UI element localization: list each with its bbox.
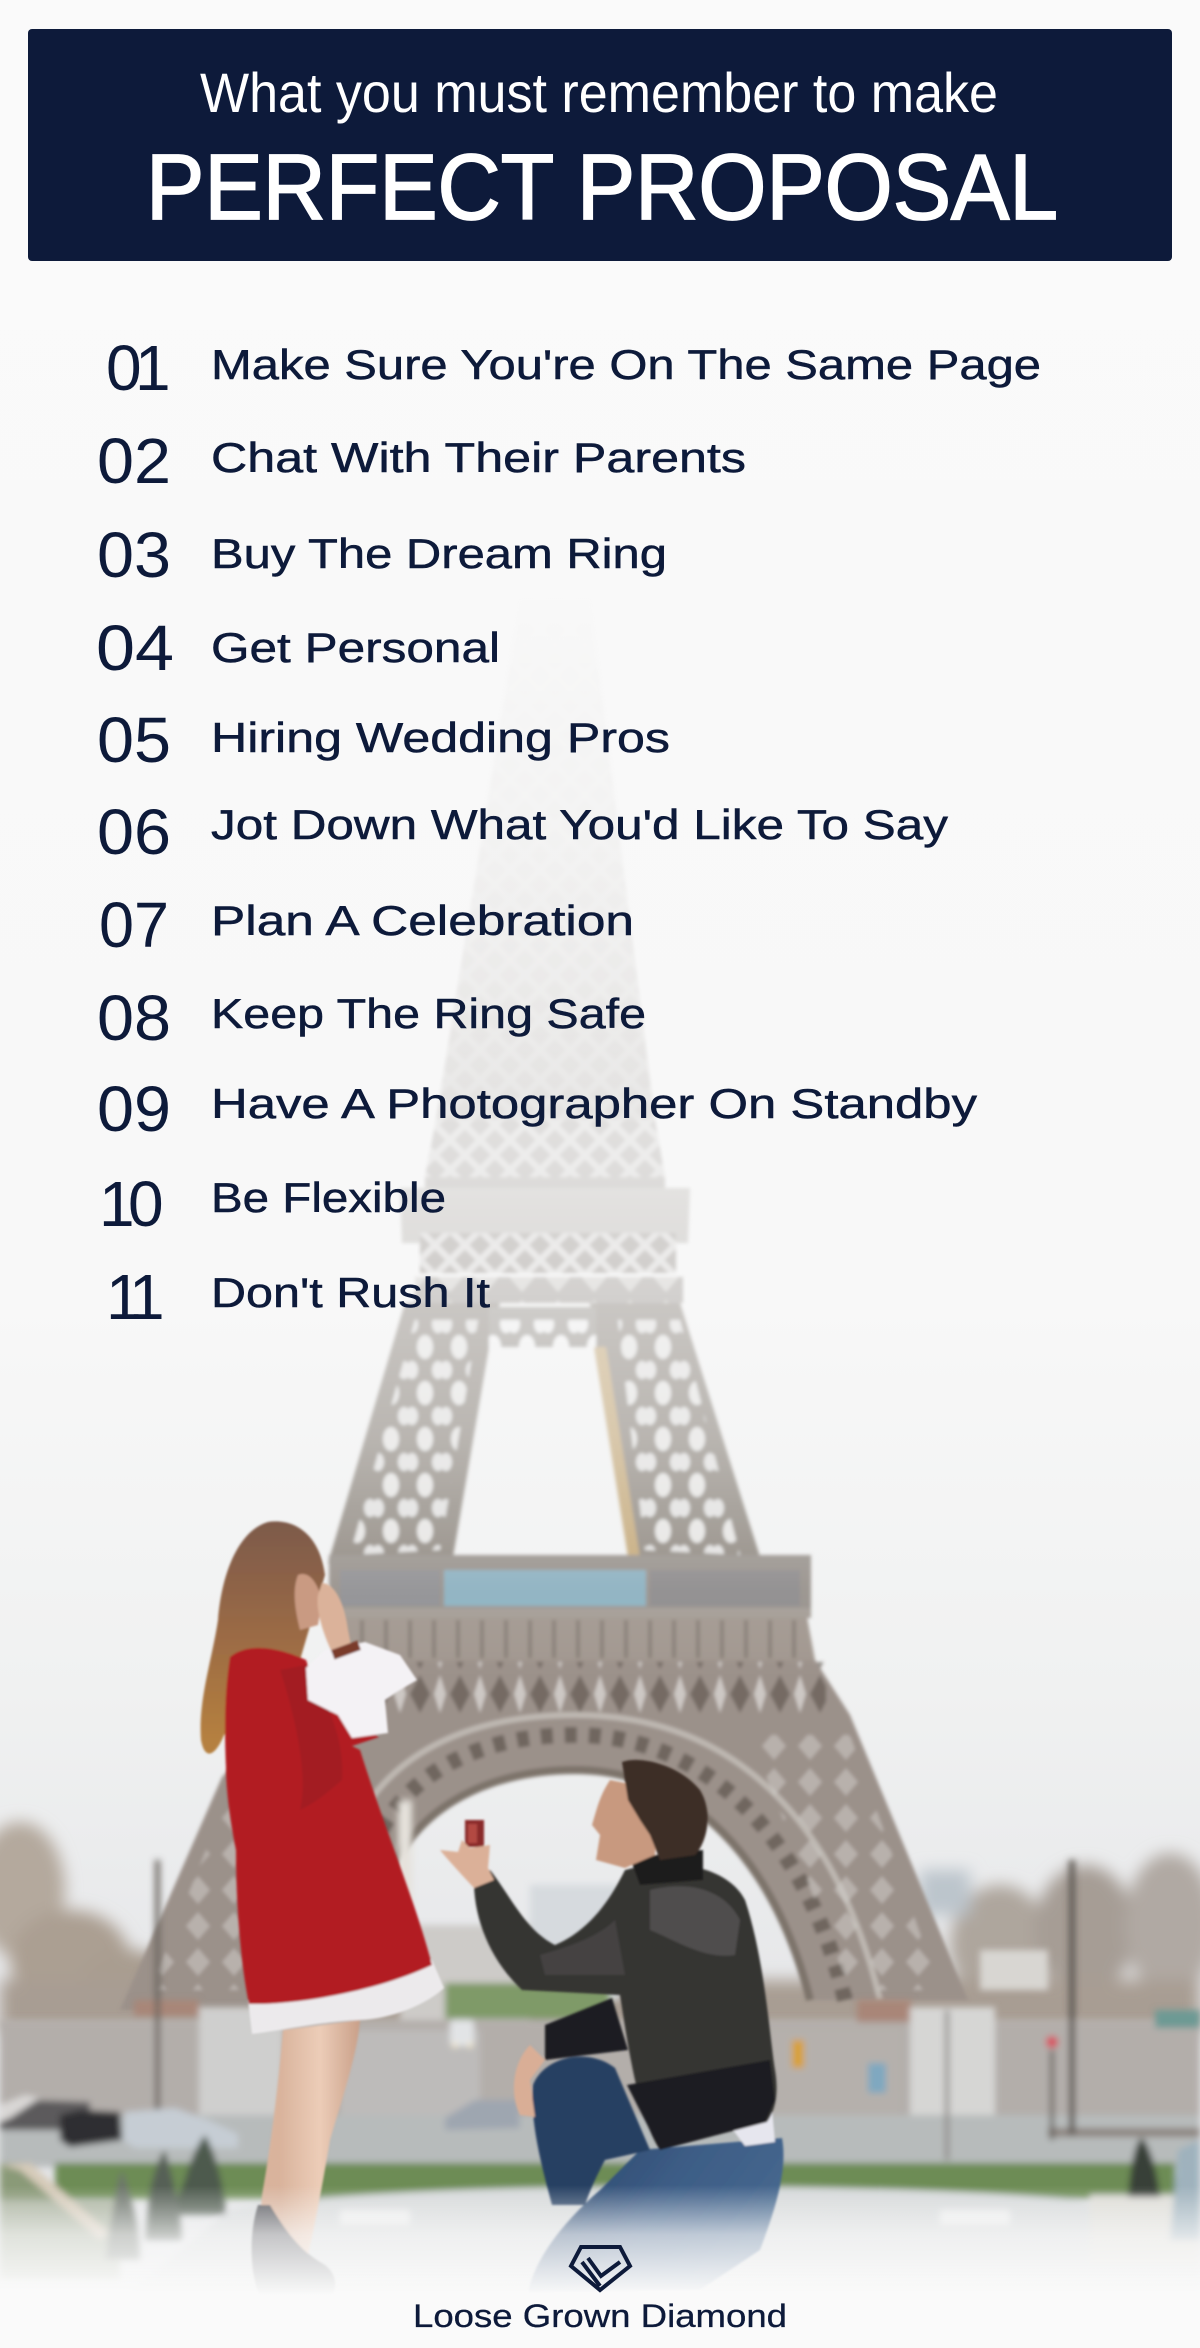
far buildings under the arch (398, 1800, 620, 2020)
item 05: 05 (97, 704, 171, 776)
item 05: Hiring Wedding Pros (211, 714, 670, 761)
upper legs (328, 1303, 762, 1563)
terrace railing (0, 2163, 108, 2240)
woman in red coat (201, 1521, 444, 2300)
bottom white fade (0, 2185, 1200, 2348)
white shirt tail (727, 2108, 775, 2146)
icon: diamond logo (571, 2247, 630, 2290)
road (0, 2115, 1200, 2167)
item 02: 02 (97, 425, 171, 497)
item 11: Don't Rush It (211, 1269, 490, 1316)
ring box (465, 1820, 484, 1847)
header banner (28, 29, 1172, 261)
reflecting pool (0, 2186, 1200, 2300)
item 11: 1 (129, 1261, 165, 1333)
item 09: 09 (97, 1073, 171, 1145)
item 02: Chat With Their Parents (211, 434, 746, 481)
hand on knee (514, 2045, 545, 2117)
lawn (0, 2163, 1175, 2240)
item 11: 1 (106, 1261, 142, 1333)
item 10: 1 (99, 1168, 135, 1240)
item 03 (97, 519, 667, 591)
subtitle: What you must remember to make (200, 61, 998, 124)
item 05 (97, 704, 670, 776)
item 03: 03 (97, 519, 171, 591)
checklist (96, 332, 1041, 1333)
item 01: 0 (106, 332, 142, 404)
red coat (225, 1648, 432, 2004)
main title: PERFECT PROPOSAL (146, 135, 1058, 239)
hand with box (440, 1840, 494, 1888)
item 10: Be Flexible (211, 1174, 446, 1221)
tower spire (425, 852, 664, 1178)
hair (201, 1521, 325, 1754)
item 06 (97, 796, 948, 868)
item 08 (97, 982, 646, 1054)
item 03: Buy The Dream Ring (211, 530, 667, 577)
item 07: 07 (99, 889, 169, 961)
jeans (528, 2057, 783, 2292)
item 04: 04 (96, 612, 174, 684)
second platform (400, 1177, 690, 1303)
item 01: Make Sure You're On The Same Page (211, 341, 1041, 388)
distant trees (0, 1822, 1200, 2030)
item 09: Have A Photographer On Standby (211, 1080, 977, 1127)
item 08: Keep The Ring Safe (211, 990, 646, 1037)
dress trim (248, 1960, 444, 2034)
item 11 (106, 1261, 490, 1333)
brand name: Loose Grown Diamond (413, 2298, 787, 2334)
lamp posts (155, 1860, 1075, 2160)
legs (252, 2020, 360, 2300)
item 04 (96, 612, 500, 684)
item 08: 08 (97, 982, 171, 1054)
item 04: Get Personal (211, 624, 500, 671)
head (592, 1760, 708, 1868)
item 01: 1 (135, 332, 171, 404)
collar (630, 1850, 703, 1885)
brand logo and name (413, 2247, 787, 2334)
Eiffel tower (122, 852, 966, 2010)
face and hands (295, 1574, 361, 1659)
parked cars (0, 2020, 520, 2148)
leather jacket (474, 1864, 777, 2150)
paper fan (306, 1642, 417, 1738)
item 10 (99, 1168, 446, 1240)
item 01 (106, 332, 1041, 404)
item 07: Plan A Celebration (211, 897, 634, 944)
topiary cones (105, 2135, 1200, 2260)
background city street (0, 1800, 1200, 2300)
item 06: 06 (97, 796, 171, 868)
item 10: 0 (128, 1168, 164, 1240)
first platform (329, 1555, 815, 1660)
terrace walls (0, 1950, 1200, 2120)
man kneeling (440, 1760, 783, 2292)
item 09 (97, 1073, 977, 1145)
arch and lower legs (120, 1660, 968, 2010)
item 02 (97, 425, 746, 497)
item 06: Jot Down What You'd Like To Say (211, 801, 948, 848)
item 07 (99, 889, 634, 961)
